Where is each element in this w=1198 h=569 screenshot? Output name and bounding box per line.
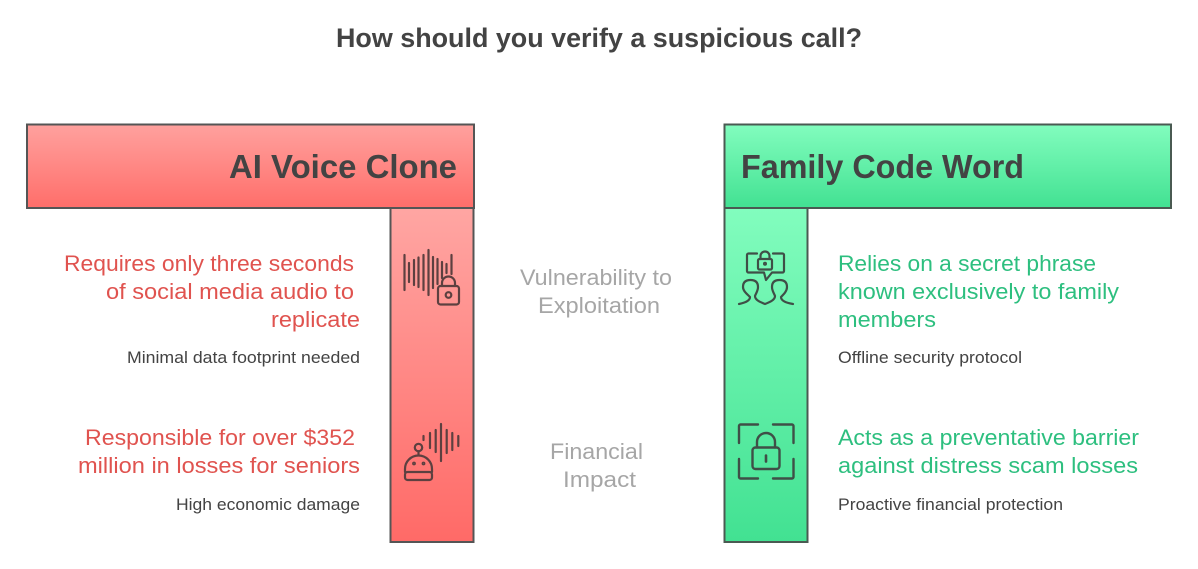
red column bbox=[390, 207, 474, 542]
red header bbox=[27, 124, 474, 208]
text block: red row 1: Minimal data footprint needed bbox=[127, 349, 360, 367]
panel: AI Voice Clone bbox=[27, 124, 474, 542]
text block: red row 2: million in losses for seniors bbox=[78, 453, 360, 478]
text block: red row 2: High economic damage bbox=[176, 496, 360, 514]
label: Vulnerability to Exploitation bbox=[520, 265, 672, 318]
text block: green row 1: Offline security protocol bbox=[838, 349, 1022, 367]
heading: AI Voice Clone: AI Voice Clone bbox=[229, 148, 457, 185]
text block: red row 1: of social media audio to bbox=[106, 279, 354, 304]
label: Vulnerability to Exploitation: Exploitation bbox=[538, 293, 660, 318]
label: Financial Impact: Financial bbox=[550, 439, 643, 464]
text block: red row 1: Requires only three seconds bbox=[64, 251, 354, 276]
text block: green row 2 bbox=[838, 425, 1140, 514]
text block: red row 2: Responsible for over $352 bbox=[85, 425, 355, 450]
icon: padlock in focus frame bbox=[739, 424, 794, 478]
heading: Family Code Word: Family Code Word bbox=[741, 148, 1024, 185]
label: Vulnerability to Exploitation: Vulnerability to bbox=[520, 265, 672, 290]
green header bbox=[724, 124, 1171, 208]
green column bbox=[724, 207, 808, 542]
panel: Family Code Word bbox=[724, 124, 1171, 542]
text block: green row 1 bbox=[838, 251, 1120, 367]
text block: green row 1: Relies on a secret phrase bbox=[838, 251, 1096, 276]
label: Financial Impact: Impact bbox=[563, 467, 637, 492]
icon: speech bubble with lock and two people bbox=[739, 252, 793, 304]
text block: red row 2 bbox=[78, 425, 360, 514]
text block: red row 1 bbox=[64, 251, 360, 367]
label: Financial Impact bbox=[550, 439, 643, 492]
text block: green row 1: known exclusively to family bbox=[838, 279, 1120, 304]
icon: waveform with lock bbox=[404, 250, 459, 304]
text block: green row 2: Proactive financial protection bbox=[838, 496, 1063, 514]
text block: green row 2: Acts as a preventative barrier bbox=[838, 425, 1140, 450]
title: How should you verify a suspicious call? bbox=[336, 23, 862, 53]
text block: red row 1: replicate bbox=[271, 307, 360, 332]
icon: robot with sound wave bbox=[405, 424, 458, 480]
text block: green row 2: against distress scam losses bbox=[838, 453, 1138, 478]
text block: green row 1: members bbox=[838, 307, 936, 332]
